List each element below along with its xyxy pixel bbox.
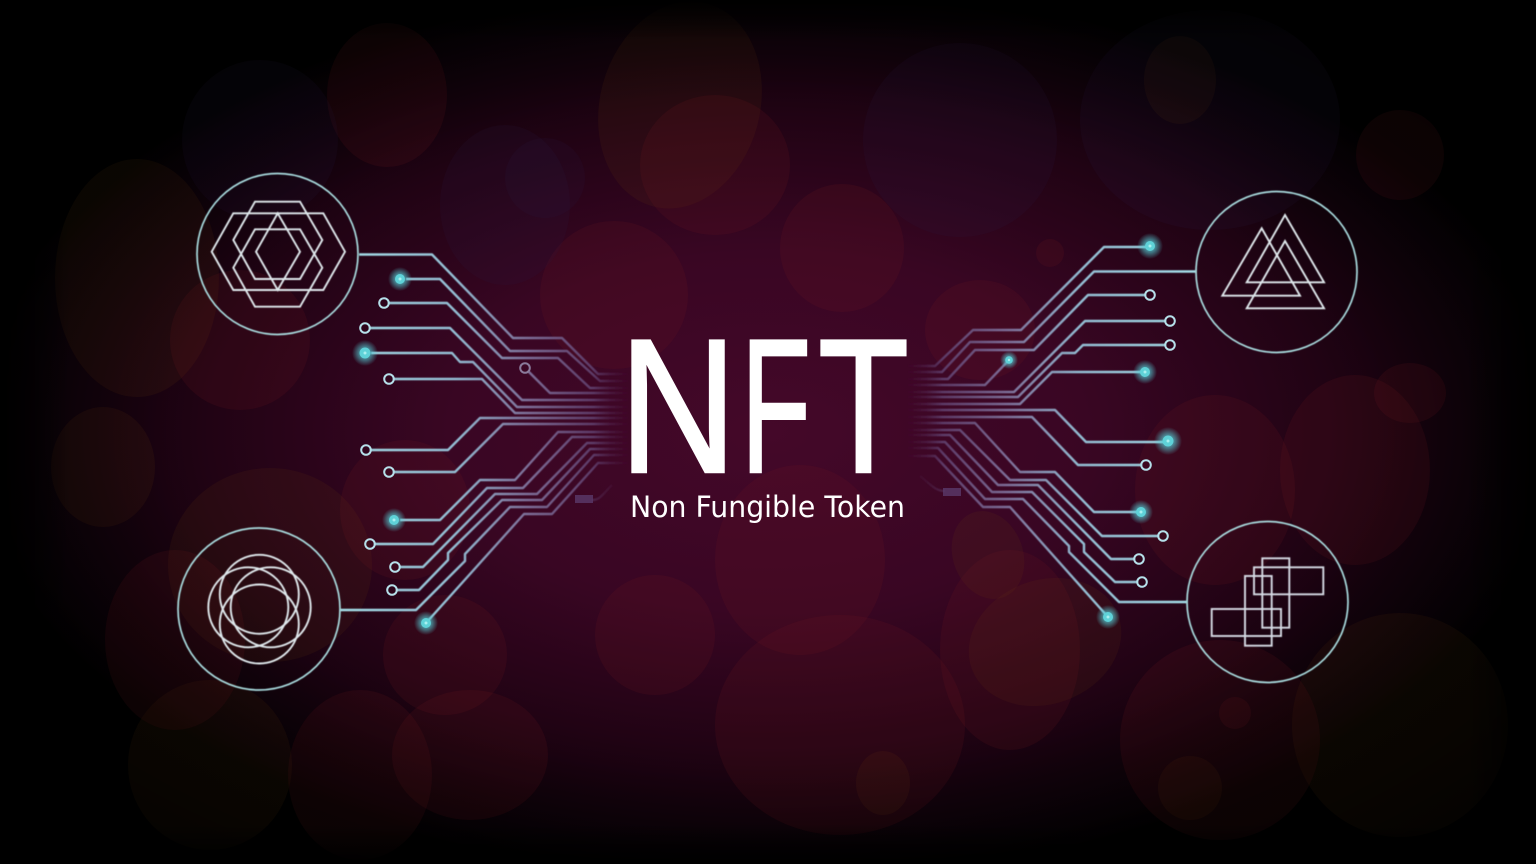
left connector stub (575, 495, 593, 503)
icon: rectangles in circle (1187, 522, 1348, 682)
title: NFT: F (741, 300, 811, 513)
subtitle: Non Fungible Token: Non Fungible Token (630, 490, 905, 524)
right connector stub (943, 488, 961, 496)
title: NFT: T (818, 300, 909, 513)
icon: hexagons in circle (197, 174, 358, 334)
glowing nodes (352, 233, 1182, 635)
right ring terminals (1134, 290, 1175, 587)
icon: triangles in circle (1196, 192, 1357, 352)
title: NFT: N (619, 300, 737, 513)
left ring terminals (360, 298, 530, 595)
title: NFT (619, 300, 909, 513)
icon: overlapping circles in circle (178, 528, 340, 690)
right circuit traces (908, 247, 1196, 617)
left circuit traces (340, 254, 628, 623)
